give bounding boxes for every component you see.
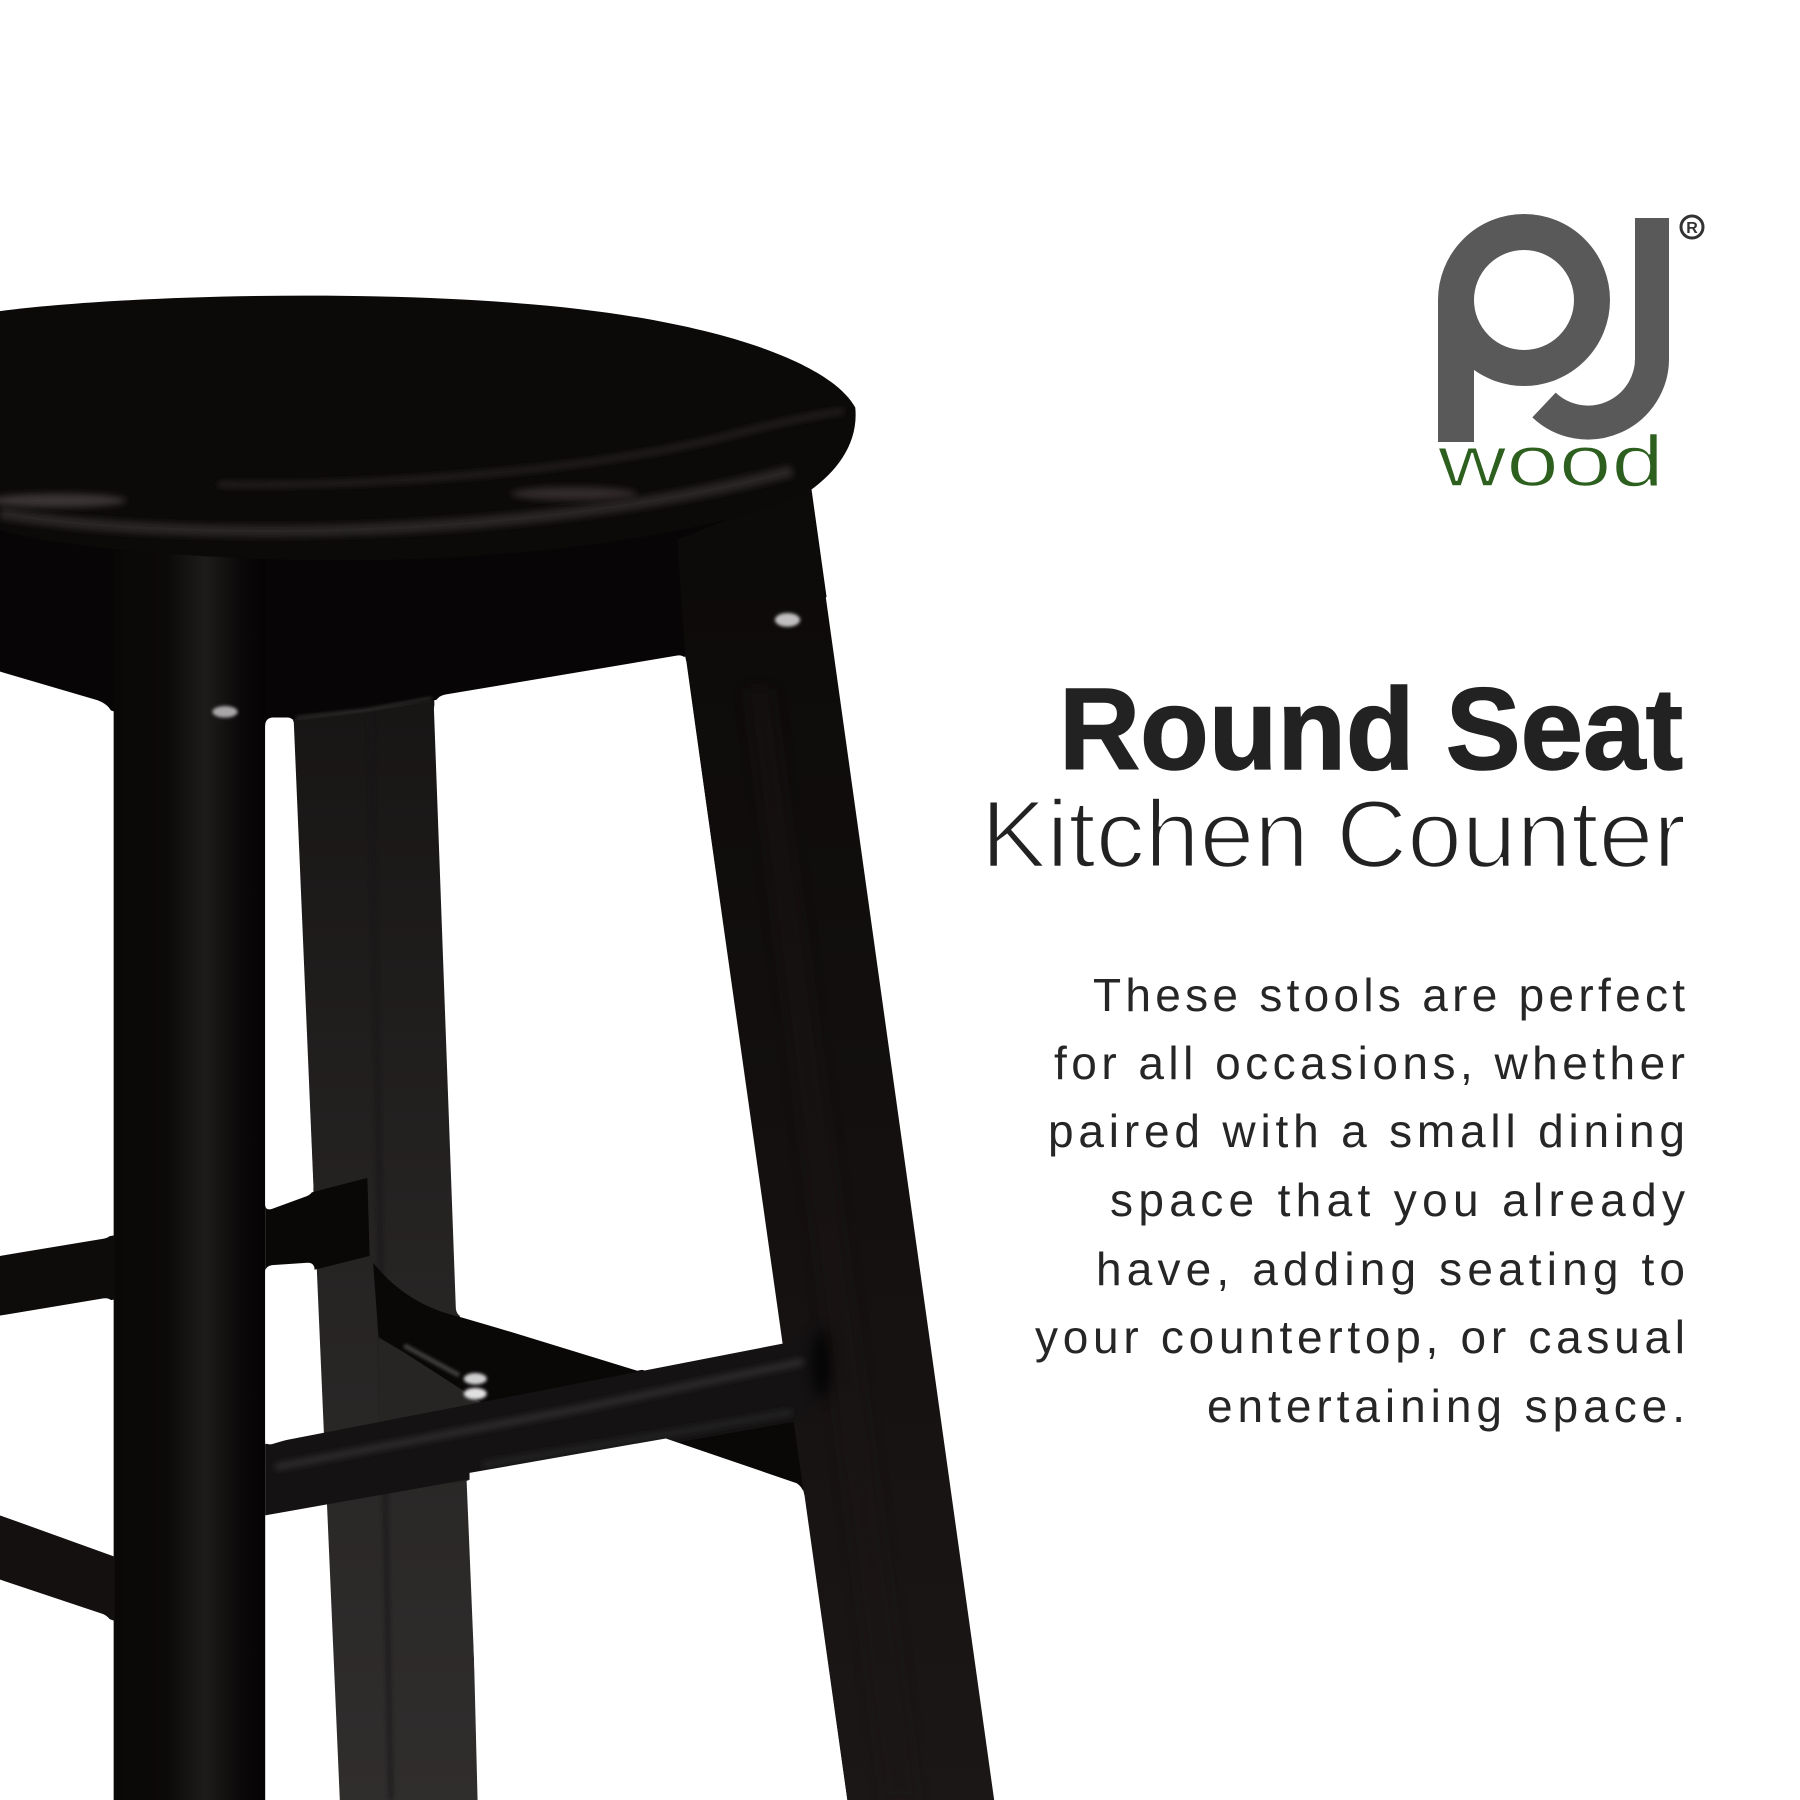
body text: These stools are perfect: [1093, 969, 1685, 1021]
rear brace to right leg: [373, 1263, 809, 1492]
logo letter j: [1544, 218, 1652, 423]
seat rim highlight: [218, 411, 844, 485]
front left leg: [114, 551, 265, 1800]
photo: black round seat stool: [0, 296, 994, 1800]
left upper stretcher: [0, 1235, 115, 1316]
area below brace: [379, 1337, 643, 1483]
seat left highlight: [0, 494, 126, 507]
body text: have, adding seating to: [1096, 1243, 1685, 1295]
body text: [1035, 969, 1685, 1432]
body text: for all occasions, whether: [1054, 1037, 1685, 1089]
back leg: [293, 693, 480, 1800]
body text: space that you already: [1110, 1174, 1685, 1226]
right screw: [775, 613, 800, 627]
lower brace piece near right leg: [654, 1412, 809, 1492]
rod collar at right leg: [813, 1329, 831, 1398]
left lower stretcher: [0, 1515, 115, 1621]
seat: [0, 296, 856, 560]
registered mark: [1681, 216, 1703, 238]
front stretcher rod: [265, 1320, 831, 1515]
seat front edge sheen: [0, 471, 792, 531]
body text: paired with a small dining: [1048, 1105, 1685, 1157]
back leg top seam: [296, 698, 432, 718]
white cutouts between stool members: [0, 655, 847, 1800]
left screw: [212, 706, 238, 718]
seat mid highlight: [511, 487, 637, 501]
body text: entertaining space.: [1207, 1380, 1685, 1432]
heading: Round Seat: Round Seat: [1059, 664, 1683, 794]
right leg: [677, 488, 994, 1800]
apron under seat: [0, 482, 827, 728]
brace light streak: [404, 1345, 459, 1375]
subheading: Kitchen Counter: Kitchen Counter: [981, 781, 1686, 888]
registered mark: R: [1686, 220, 1698, 237]
logo letter p: [1456, 232, 1592, 442]
body text: your countertop, or casual: [1035, 1311, 1685, 1363]
middle stub stretcher: [265, 1178, 370, 1270]
logo: pj wood: [1437, 216, 1703, 502]
bolt heads: [464, 1373, 487, 1399]
logo word wood: wood: [1437, 422, 1664, 502]
